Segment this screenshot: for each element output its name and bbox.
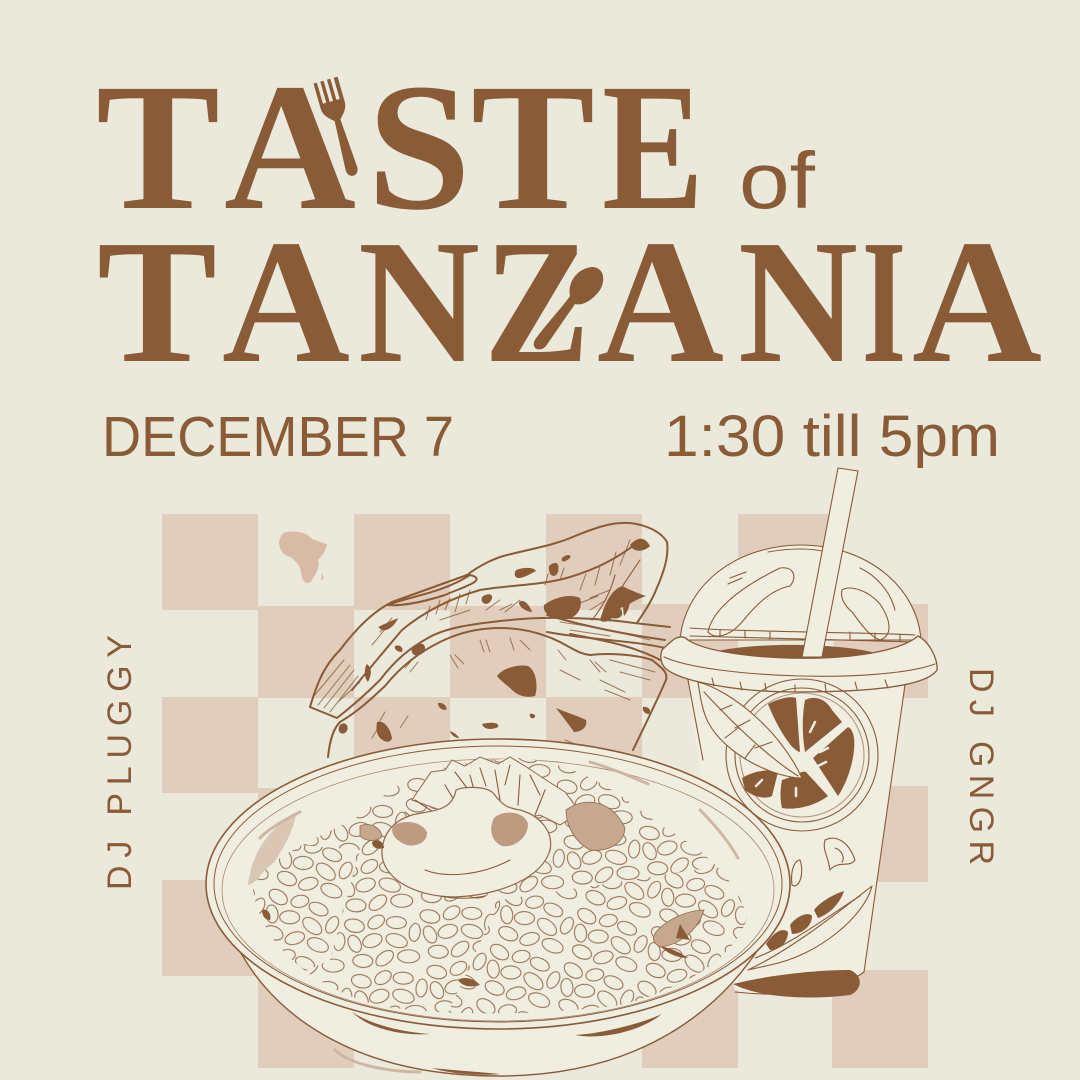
icon: spoon xyxy=(534,267,603,349)
bowl shading xyxy=(248,762,738,1075)
title line 2: TANZANIA: N xyxy=(738,204,858,400)
liquid at top xyxy=(718,645,880,660)
bottom liquid xyxy=(733,970,860,997)
rice accents xyxy=(360,802,704,947)
title line 1: TASTE: S xyxy=(367,47,471,248)
cup swirl details xyxy=(792,838,855,886)
upper flatbread xyxy=(310,523,670,718)
lower flatbread xyxy=(328,628,668,757)
lid dome xyxy=(680,545,921,642)
rice mound xyxy=(253,758,747,1014)
DJ right label: DJ GNGR xyxy=(962,668,1000,865)
title line 2: TANZANIA: A xyxy=(222,204,350,400)
date: DECEMBER 7 xyxy=(102,405,454,469)
bowl illustration xyxy=(206,739,790,1076)
title xyxy=(96,47,1042,400)
parsley garnish xyxy=(412,757,580,825)
title line 1: TASTE: E xyxy=(602,47,704,248)
drink cup illustration xyxy=(661,468,937,997)
title line 2: TANZANIA: A xyxy=(597,204,724,400)
orange slice xyxy=(726,679,878,831)
mint leaf xyxy=(698,682,802,778)
title line 1: TASTE: T xyxy=(471,47,595,248)
title line 1: TASTE: T xyxy=(96,47,220,248)
bread spots xyxy=(365,539,650,682)
bread hatching xyxy=(314,540,650,712)
checkerboard backdrop xyxy=(162,514,928,1068)
bowl lower body xyxy=(230,930,770,1076)
title line 2: TANZANIA: Z xyxy=(484,204,590,400)
title line 2: TANZANIA: T xyxy=(97,204,217,400)
lid rim xyxy=(661,636,937,692)
cup body xyxy=(688,680,905,993)
title line 1: TASTE: A xyxy=(224,47,356,248)
icon: Africa map xyxy=(279,532,327,583)
lower bread spots xyxy=(339,665,650,742)
title line 2: TANZANIA: I xyxy=(862,204,906,400)
DJ left label: DJ PLUGGY xyxy=(101,635,139,890)
time: 1:30 till 5pm xyxy=(664,404,1000,469)
bowl rim xyxy=(206,739,790,1029)
icon: fork xyxy=(314,77,365,180)
mushroom xyxy=(382,787,551,898)
lower leaf / garnish xyxy=(748,886,872,970)
straw xyxy=(802,468,858,657)
title word: of: of xyxy=(739,136,816,225)
title line 2: TANZANIA: A xyxy=(912,204,1042,400)
title line 2: TANZANIA: N xyxy=(358,204,480,400)
flatbread illustration xyxy=(310,523,670,757)
